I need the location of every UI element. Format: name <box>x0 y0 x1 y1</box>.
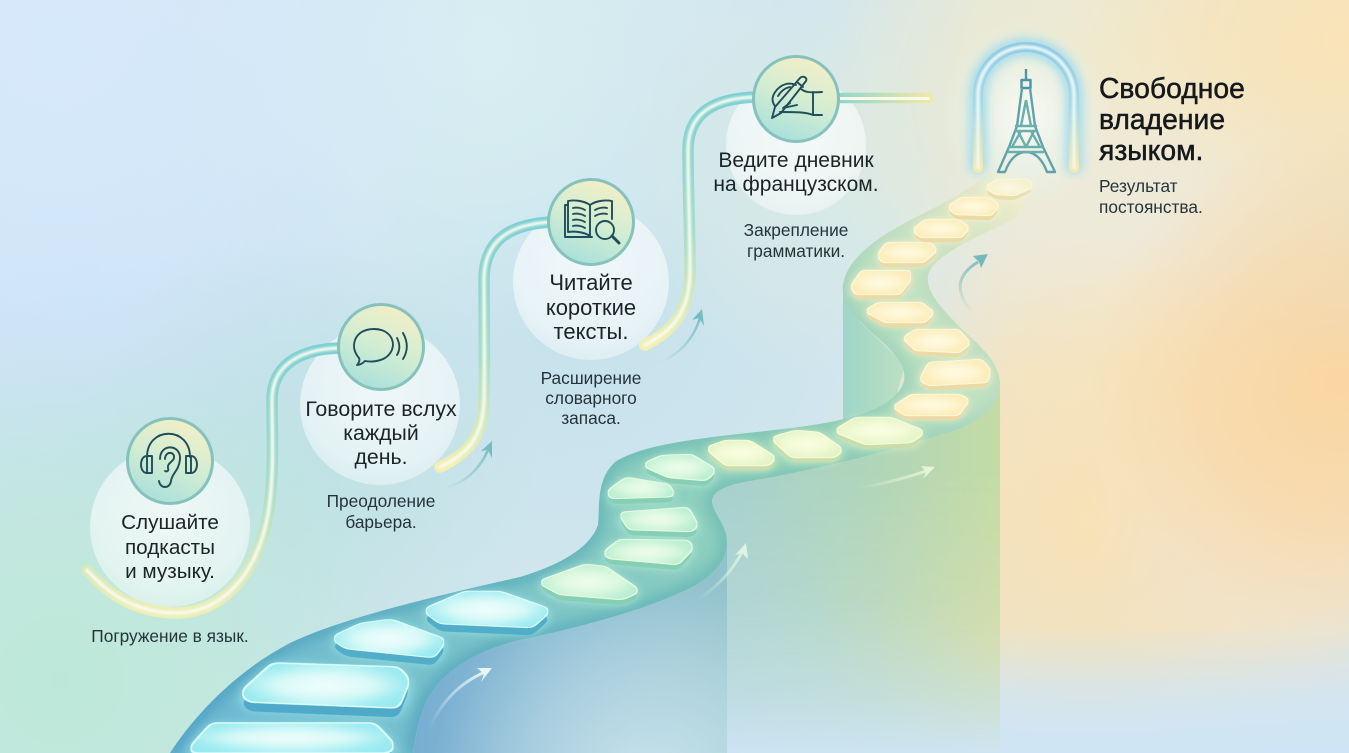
icon: open book with magnifier <box>548 180 634 264</box>
note step 3: Расширение <box>541 368 641 388</box>
upper pillar <box>843 285 905 426</box>
title step 4: на французском. <box>713 173 879 196</box>
note step 4 <box>744 220 848 261</box>
goal heading: языком. <box>1099 134 1203 166</box>
disc: step 4 <box>726 75 866 215</box>
title step 2: Говорите вслух <box>305 397 457 421</box>
note step 3 <box>541 368 641 428</box>
stone 6 <box>603 540 693 564</box>
pillar under the path: right part <box>712 385 1000 753</box>
stone 10 <box>706 441 776 465</box>
disc: step 2 <box>300 325 460 485</box>
title step 2 <box>305 397 457 469</box>
connector tube 3 <box>645 97 757 345</box>
stone 13 <box>893 395 969 415</box>
stone 17 <box>851 271 910 294</box>
winding path ribbon <box>170 172 1035 753</box>
stone 20 <box>948 198 999 215</box>
goal note <box>1099 176 1203 217</box>
arrow step 3 <box>660 309 704 362</box>
title step 1: Слушайте <box>121 511 219 534</box>
title step 1 <box>121 511 219 583</box>
title step 2: день. <box>354 445 408 469</box>
icon: speech bubble with sound waves <box>338 304 424 390</box>
stone 2 <box>241 664 409 707</box>
title step 2: каждый <box>343 421 419 445</box>
goal heading <box>1099 72 1245 166</box>
arrow on pillar 3 <box>857 466 935 488</box>
goal note: Результат <box>1099 176 1178 196</box>
stone 12 <box>834 418 925 444</box>
stone 19 <box>913 220 969 237</box>
bottom light-blue wash <box>727 625 1349 753</box>
stone 5 <box>538 565 640 599</box>
disc: step 1 <box>90 447 250 607</box>
connector tube 4 <box>835 93 928 104</box>
note step 4: Закрепление <box>744 220 848 240</box>
arrow on pillar 1 <box>430 668 492 727</box>
goal note: постоянства. <box>1099 197 1203 217</box>
stone 16 <box>865 303 934 322</box>
note step 2: Преодоление <box>327 491 435 511</box>
note step 3: словарного <box>545 388 637 408</box>
icon: headphones and ear <box>128 418 212 504</box>
title step 3: короткие <box>546 295 636 320</box>
stone 14 <box>920 360 990 385</box>
stone 4 <box>423 592 551 627</box>
stone 3 <box>331 620 446 657</box>
stone 9 <box>642 455 716 480</box>
goal arch with Eiffel tower <box>941 20 1111 210</box>
stone 1 <box>187 724 394 752</box>
goal heading: Свободное <box>1099 72 1245 104</box>
stepping stones <box>187 180 1032 752</box>
arrow step 2 <box>445 441 492 488</box>
title step 3 <box>546 270 636 344</box>
note step 2 <box>327 491 435 532</box>
title step 3: Читайте <box>549 270 633 295</box>
stone 7 <box>619 508 698 531</box>
connector tube 2 <box>440 222 552 467</box>
disc: step 3 <box>513 204 669 360</box>
stone 8 <box>607 478 675 498</box>
title step 3: тексты. <box>554 319 628 344</box>
note step 4: грамматики. <box>747 241 845 261</box>
arrow beside upper path <box>960 254 988 313</box>
title step 4: Ведите дневник <box>718 149 874 172</box>
stone 11 <box>771 431 843 457</box>
title step 1: и музыку. <box>125 560 215 583</box>
title step 4 <box>713 149 879 196</box>
connector tube 1 <box>87 348 340 613</box>
goal heading: владение <box>1099 103 1225 135</box>
note step 3: запаса. <box>561 408 621 428</box>
icon: hand writing with a pen <box>754 56 838 142</box>
note step 1: Погружение в язык. <box>91 626 249 646</box>
stone 18 <box>878 243 937 262</box>
note step 2: барьера. <box>345 512 417 532</box>
stone 21 <box>985 180 1032 195</box>
pillar under the path: left part <box>413 542 727 753</box>
stone 15 <box>903 330 970 352</box>
title step 1: подкасты <box>125 536 215 559</box>
arrow on pillar 2 <box>697 543 748 600</box>
